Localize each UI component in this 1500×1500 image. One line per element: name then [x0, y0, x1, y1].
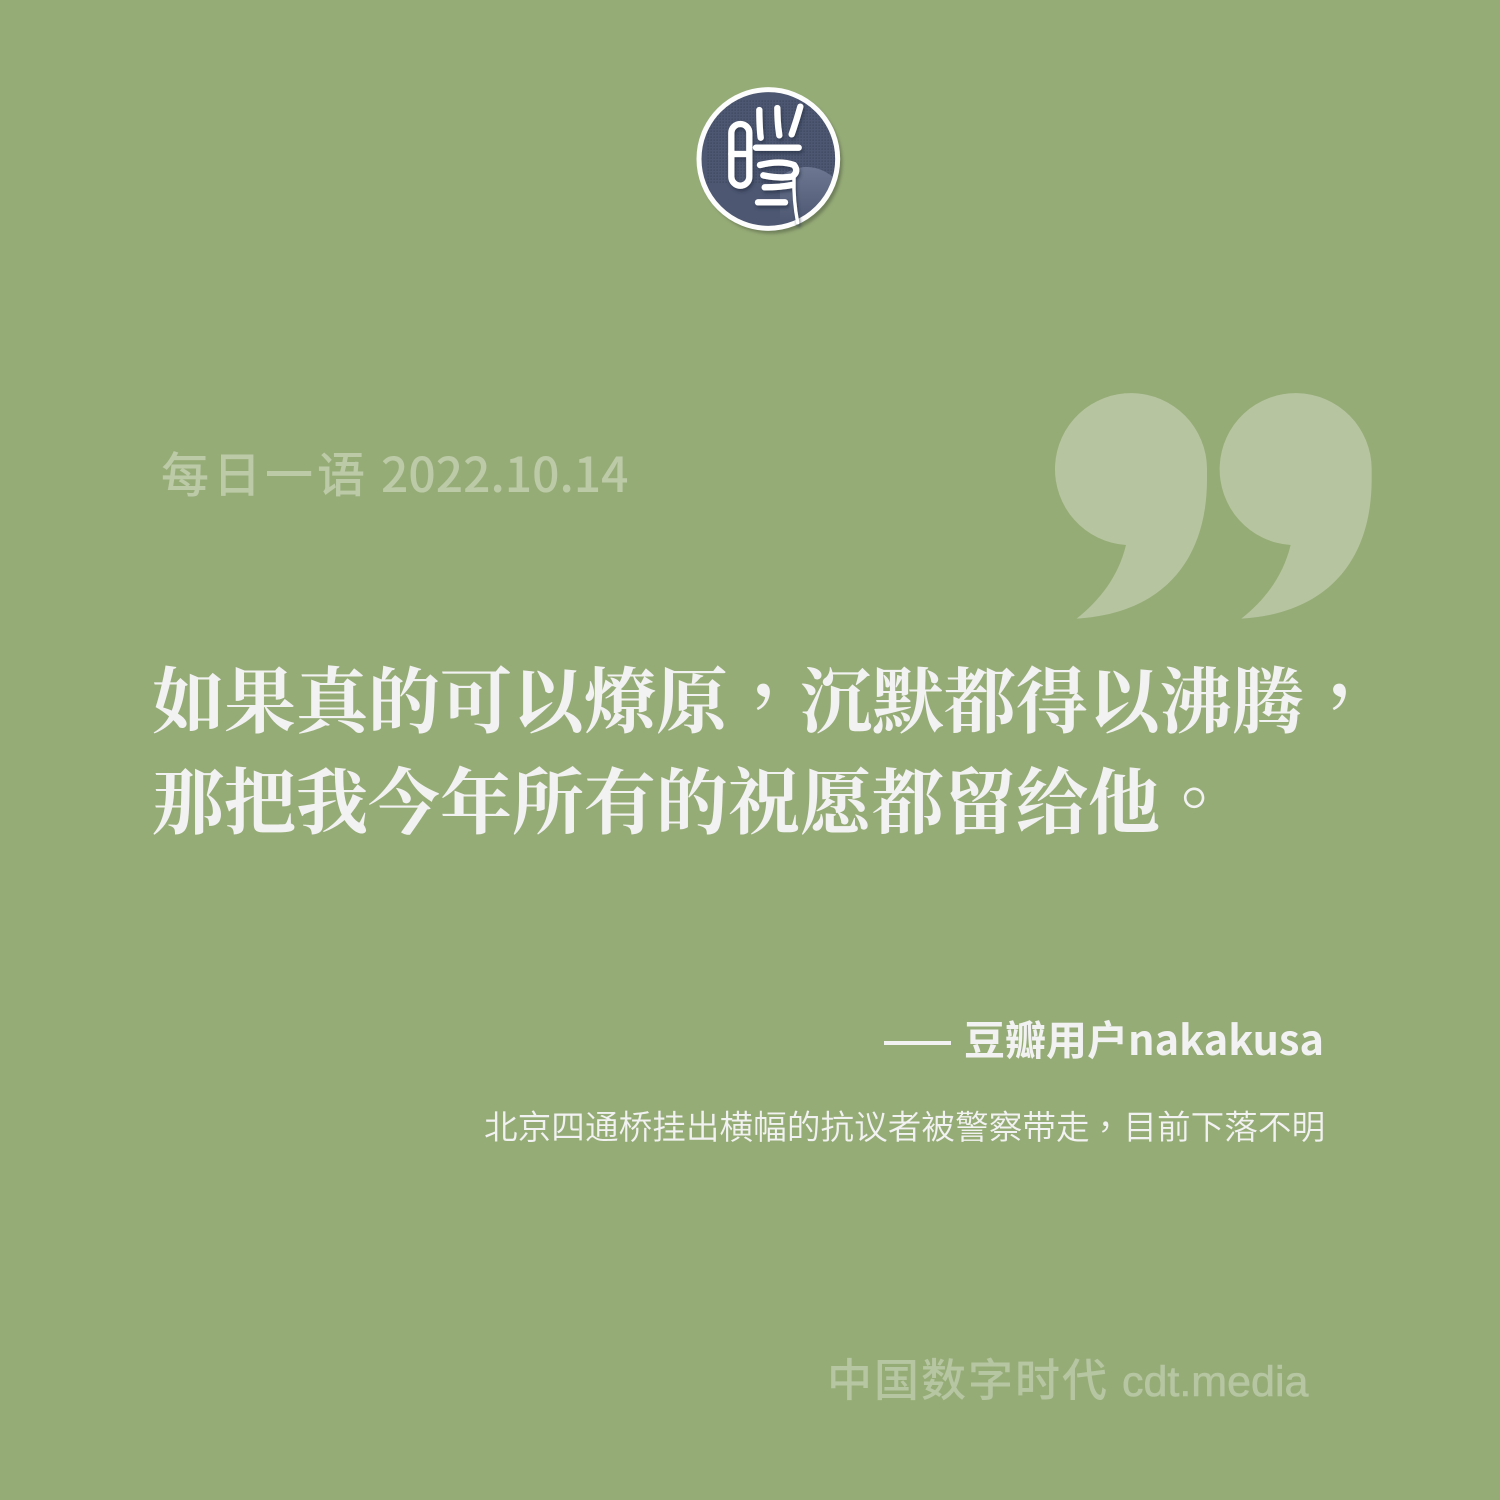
context note: 北京四通桥挂出横幅的抗议者被警察带走，目前下落不明 — [484, 1090, 1325, 1149]
footer brand: 中国数字时代 — [827, 1344, 1109, 1409]
footer brand: cdt.media — [1122, 1358, 1308, 1406]
date heading: 每日一语 — [161, 436, 369, 506]
attribution: 豆瓣用户nakakusa — [964, 1007, 1324, 1067]
main quote: 如果真的可以燎原 ，沉默都得以沸腾 ， — [152, 611, 1401, 748]
main quote — [152, 611, 1401, 849]
footer brand — [827, 1344, 1309, 1409]
date heading: 2022.10.14 — [381, 436, 628, 506]
date heading — [161, 436, 628, 506]
decorative quotation mark — [1055, 393, 1372, 618]
main quote: 那把我今年所有的祝愿都留给他 。 — [152, 719, 1253, 849]
icon: logo seal — [696, 87, 844, 235]
